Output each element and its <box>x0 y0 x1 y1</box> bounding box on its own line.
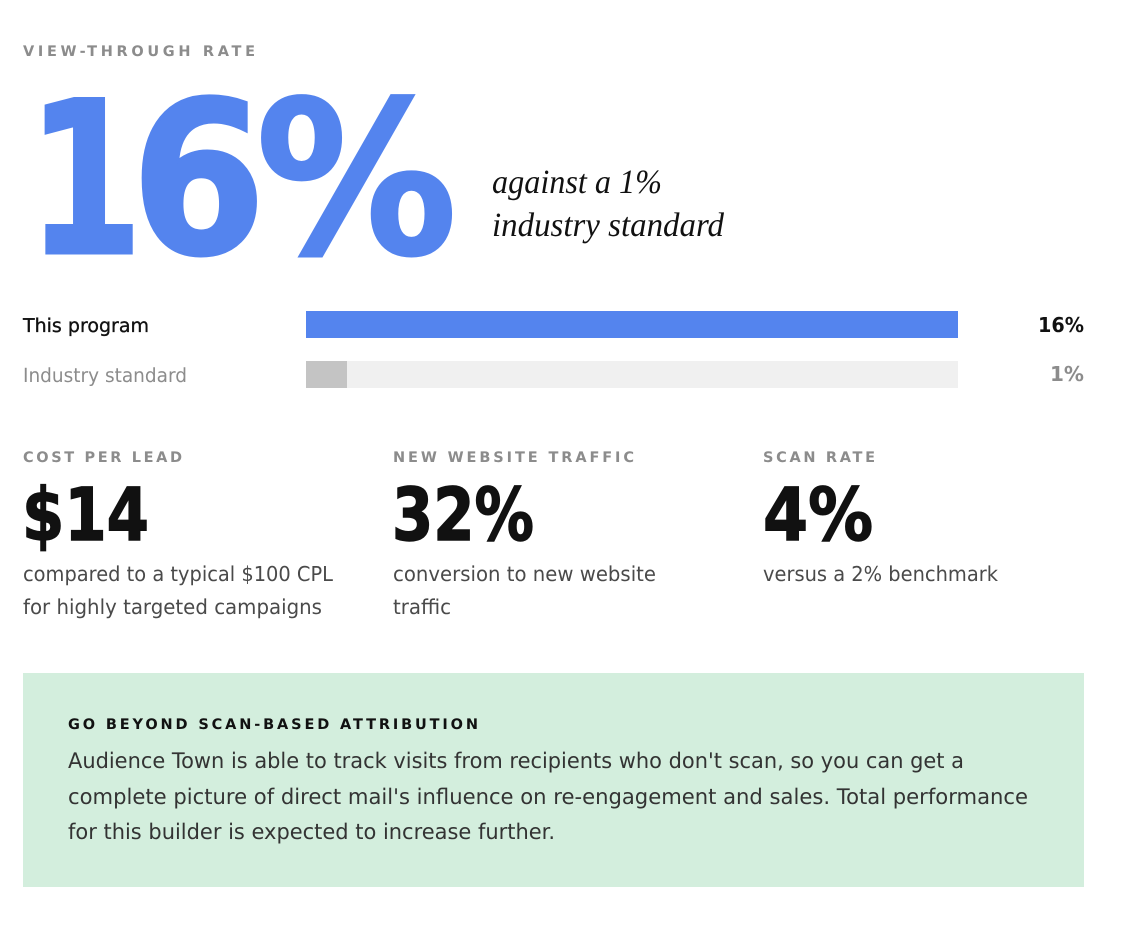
handwritten note: against a 1% <box>492 164 662 201</box>
row: this program <box>22 311 1084 338</box>
row: this program: This program <box>22 315 149 337</box>
big number: 16%: 6 <box>131 56 266 303</box>
stat: cost per lead: COST PER LEAD <box>23 450 182 466</box>
stat: cost per lead <box>22 450 334 619</box>
stat: new website traffic: traffic <box>393 595 451 619</box>
row: industry standard: 1% <box>1050 362 1084 386</box>
stat: scan rate: versus a 2% benchmark <box>763 562 998 586</box>
stat: cost per lead: for highly targeted campaigns <box>23 595 322 619</box>
row: this program: 16% <box>1038 313 1084 337</box>
stat: scan rate: SCAN RATE <box>763 450 875 466</box>
panel: scan-based attribution callout <box>23 673 1084 887</box>
stat: cost per lead: $14 <box>22 473 149 558</box>
callout heading: GO BEYOND SCAN-BASED ATTRIBUTION <box>68 717 478 733</box>
big number: 16% <box>27 56 457 303</box>
stat: new website traffic <box>392 450 656 619</box>
bar chart: program vs industry <box>22 311 1084 388</box>
callout body text: Audience Town is able to track visits from recipients who don't scan, so you can get a <box>68 749 964 774</box>
big number: 16%: 1 <box>27 56 143 303</box>
handwritten note <box>492 164 725 244</box>
section: headline metric <box>23 44 725 303</box>
handwritten note: industry standard <box>492 207 725 244</box>
big number: 16%: % <box>256 56 457 303</box>
stat: cost per lead: compared to a typical $100 CPL <box>23 562 334 586</box>
stat: new website traffic: 32% <box>392 473 534 558</box>
stat: new website traffic: NEW WEBSITE TRAFFIC <box>393 450 634 466</box>
row: industry standard: Industry standard <box>23 364 187 387</box>
stat: scan rate <box>763 450 998 586</box>
callout body text: for this builder is expected to increase further. <box>68 820 555 845</box>
callout body text <box>68 749 1028 845</box>
stat: new website traffic: conversion to new website <box>393 562 656 586</box>
row: industry standard <box>23 361 1084 388</box>
stat: scan rate: 4% <box>763 473 873 558</box>
label: view-through rate: VIEW-THROUGH RATE <box>23 44 255 60</box>
callout body text: complete picture of direct mail's influence on re-engagement and sales. Total performance <box>68 785 1028 810</box>
